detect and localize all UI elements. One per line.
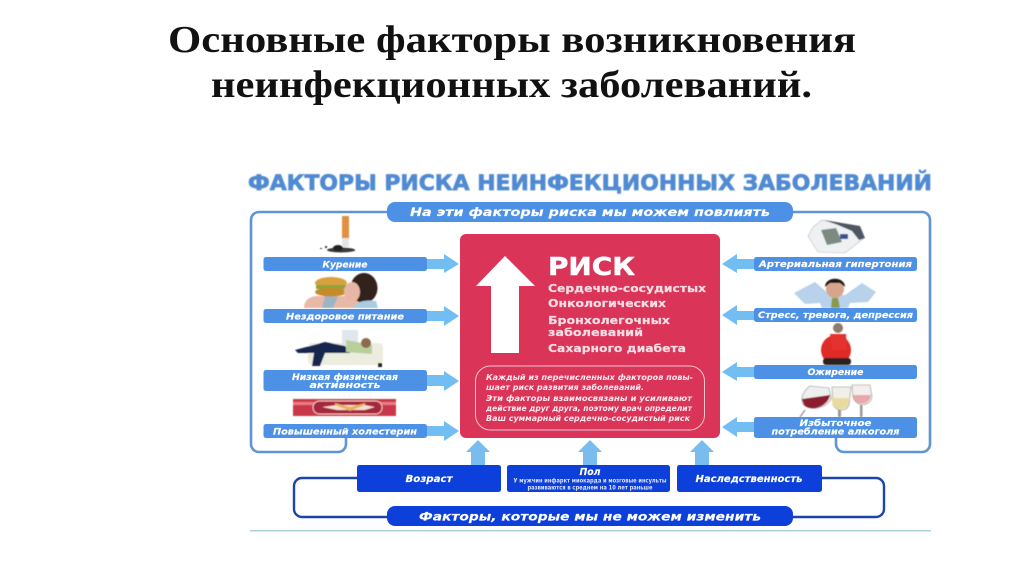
- factor: heredity: [677, 465, 822, 492]
- factor: high cholesterol: [264, 421, 459, 441]
- panel: non-modifiable factors: [294, 440, 884, 526]
- factor: arterial hypertension: Артериальная гипертония: [758, 260, 912, 270]
- icon: clogged artery: [293, 399, 396, 416]
- factor: obesity: Ожирение: [808, 368, 864, 378]
- panel: modifiable factors frame: [251, 212, 930, 452]
- non-modifiable pill: [387, 506, 793, 526]
- modifiable factors pill: [387, 202, 793, 222]
- factor: excessive alcohol: Избыточное: [800, 418, 872, 429]
- title: Основные факторы возникновения: [168, 19, 856, 61]
- icon: obese person: [821, 323, 851, 365]
- panel: left factors: [264, 216, 459, 441]
- risk heading: РИСК: [548, 252, 635, 281]
- factor: excessive alcohol: потребление алкоголя: [772, 426, 900, 438]
- risk list: Сахарного диабета: [548, 342, 686, 355]
- icon: up arrow: [476, 256, 535, 353]
- factor: excessive alcohol: [722, 417, 917, 438]
- factor: low physical activity: Низкая физическая: [292, 373, 398, 383]
- infographic heading: ФАКТОРЫ РИСКА НЕИНФЕКЦИОННЫХ ЗАБОЛЕВАНИЙ: [248, 170, 932, 195]
- factor: sex: [507, 465, 670, 492]
- factor: low physical activity: [264, 370, 459, 391]
- factor: unhealthy diet: Нездоровое питание: [286, 312, 404, 322]
- icon: blood pressure monitor: [808, 220, 865, 253]
- factor: age: [357, 465, 501, 492]
- factor: sex: Пол: [580, 467, 601, 478]
- panel: risk: [460, 234, 720, 438]
- factor: obesity: [722, 362, 917, 381]
- risk note: Каждый из перечисленных факторов повы-: [486, 373, 693, 382]
- factor: high cholesterol: Повышенный холестерин: [273, 428, 417, 438]
- modifiable factors pill: На эти факторы риска мы можем повлиять: [410, 205, 770, 219]
- risk list: Сердечно-сосудистых: [548, 282, 706, 295]
- title: [168, 19, 856, 106]
- risk note: Ваш суммарный сердечно-сосудистый риск: [486, 414, 691, 423]
- risk list: Бронхолегочных: [548, 314, 670, 327]
- factor: smoking: [264, 254, 459, 273]
- factor: smoking: Курение: [322, 260, 368, 270]
- non-modifiable pill: Факторы, которые мы не можем изменить: [419, 510, 761, 524]
- icon: person eating burger: [304, 273, 378, 308]
- factor: stress: Стресс, тревога, депрессия: [758, 311, 913, 321]
- factor: heredity: Наследственность: [696, 474, 802, 485]
- risk list: Онкологических: [548, 297, 666, 310]
- factor: arterial hypertension: [722, 254, 917, 273]
- non-modifiable loop line: [294, 478, 884, 517]
- factor: stress: [722, 305, 917, 325]
- icon: wine glasses: [800, 385, 872, 417]
- icon: stressed man: [794, 279, 876, 308]
- risk note: действие друг друга, поэтому врач определит: [485, 404, 692, 413]
- icon: man on sofa: [295, 330, 383, 367]
- factor: age: Возраст: [406, 474, 453, 485]
- factor: low physical activity: активность: [310, 381, 381, 391]
- factor: unhealthy diet: [264, 306, 459, 326]
- risk list: заболеваний: [548, 326, 643, 339]
- title: неинфекционных заболеваний.: [211, 64, 812, 106]
- risk list: [548, 282, 706, 355]
- icon: cigarette: [320, 216, 355, 252]
- factor: sex: развиваются в среднем на 10 лет раньше: [528, 486, 653, 492]
- risk note: [476, 366, 704, 430]
- risk note: Эти факторы взаимосвязаны и усиливают: [486, 394, 693, 403]
- panel: right factors: [722, 220, 917, 438]
- arrows up to risk: [466, 440, 714, 465]
- risk note: шает риск развития заболеваний.: [486, 383, 644, 392]
- factor: sex: У мужчин инфаркт миокарда и мозговые инсульты: [514, 478, 666, 484]
